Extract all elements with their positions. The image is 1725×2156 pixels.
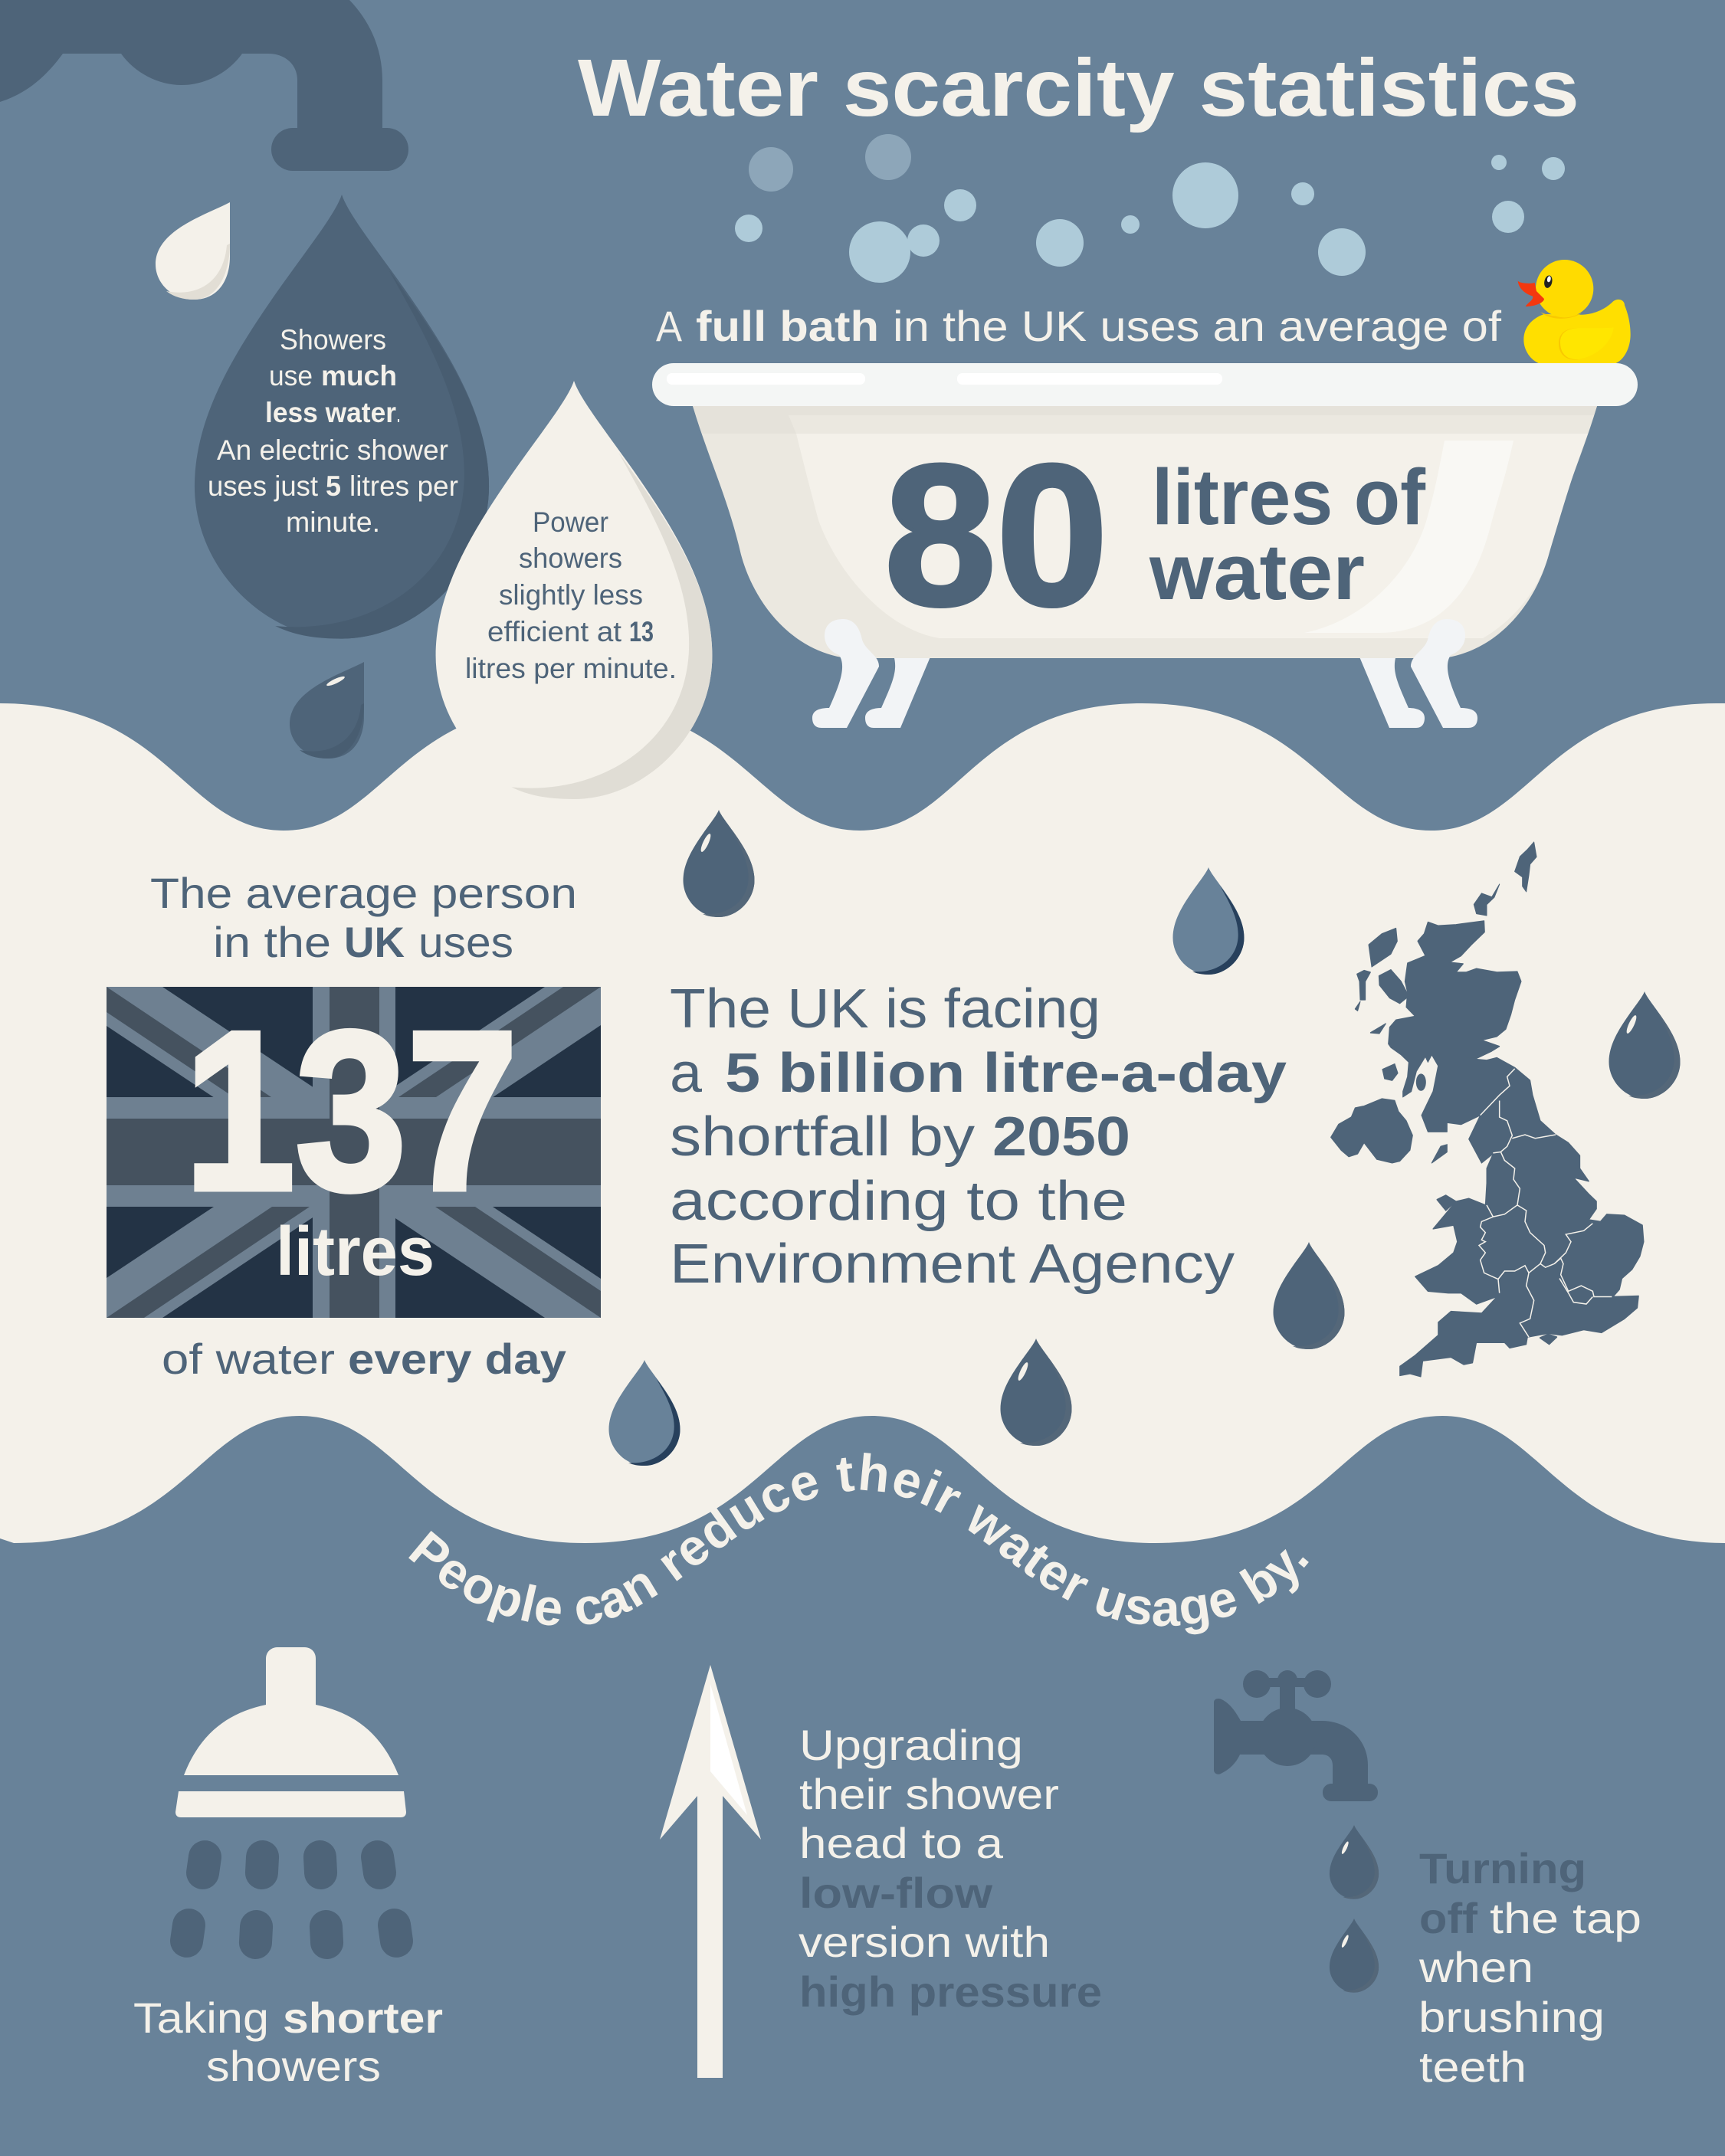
text: UK shortfall statement: 2050 xyxy=(992,1106,1130,1168)
text: UK shortfall statement: shortfall by xyxy=(670,1106,975,1168)
icon: large faucet xyxy=(0,0,408,171)
showers text: . xyxy=(396,397,401,428)
text: upgrading shower head: head to a xyxy=(799,1819,1004,1867)
heading: average person: uses xyxy=(418,918,513,966)
showers text: much xyxy=(321,360,397,392)
text: taking shorter showers xyxy=(133,1994,443,2090)
text: of water every day: of water xyxy=(162,1335,335,1383)
text: turning off the tap: the tap xyxy=(1490,1894,1641,1942)
text: taking shorter showers: showers xyxy=(206,2042,381,2090)
power showers text: litres per minute. xyxy=(465,653,677,684)
icon: shower head xyxy=(168,1647,415,1960)
power showers text xyxy=(465,506,677,684)
text: taking shorter showers: Taking xyxy=(133,1994,269,2042)
80 litres of water: 80 xyxy=(884,423,1108,647)
icon: tap xyxy=(1214,1670,1378,1801)
large dark drop shape xyxy=(195,195,489,639)
text: upgrading shower head xyxy=(799,1721,1102,2016)
callout: showers drop xyxy=(195,195,489,639)
large cream drop shape xyxy=(436,381,712,799)
text: upgrading shower head: their shower xyxy=(799,1770,1059,1818)
showers text: minute. xyxy=(286,506,380,538)
80 litres of water: litres of xyxy=(1152,453,1426,541)
80 litres of water xyxy=(884,423,1426,647)
front tub legs xyxy=(812,619,1477,728)
power showers text: showers xyxy=(519,542,622,574)
137 number: 137 xyxy=(184,984,518,1237)
icon: bathtub xyxy=(652,363,1638,728)
rear tub legs xyxy=(865,655,1425,728)
middle cream wave panel xyxy=(0,703,1725,1543)
icon: tap drop 1 xyxy=(1330,1825,1379,1899)
text: UK shortfall statement: The UK is facing xyxy=(670,978,1100,1040)
text: turning off the tap: teeth xyxy=(1419,2043,1527,2091)
showers text: litres per xyxy=(349,470,458,502)
map: United Kingdom xyxy=(1331,842,1644,1377)
callout: power showers drop xyxy=(436,381,712,799)
power showers text: Power xyxy=(533,506,608,538)
icon: drop F xyxy=(608,1360,680,1466)
showers text: An electric shower xyxy=(217,434,448,466)
icon: drop D xyxy=(1609,991,1680,1099)
showers text: Showers xyxy=(280,324,386,356)
text: of water every day: every day xyxy=(348,1335,566,1383)
full bath heading: A xyxy=(656,302,683,350)
title: Water scarcity statistics xyxy=(578,43,1579,133)
power showers text: 13 xyxy=(629,616,654,647)
text: upgrading shower head: version with xyxy=(799,1918,1050,1966)
text: UK shortfall statement xyxy=(670,978,1287,1295)
text: upgrading shower head: low-flow xyxy=(799,1869,992,1917)
text: turning off the tap: off xyxy=(1419,1894,1477,1942)
heading: average person: UK xyxy=(344,918,405,966)
showers text: use xyxy=(269,360,313,392)
full bath heading: full bath xyxy=(696,302,879,350)
heading: average person: in the xyxy=(213,918,331,966)
80 litres of water: water xyxy=(1149,528,1365,616)
icon: small cream drop xyxy=(156,202,230,300)
heading: average person xyxy=(150,869,577,966)
icon: rubber duck xyxy=(1518,260,1631,364)
arrow: up xyxy=(660,1665,761,2078)
icon: small dark drop xyxy=(290,662,364,759)
text: upgrading shower head: Upgrading xyxy=(799,1721,1023,1769)
showers text xyxy=(208,324,458,538)
text: UK shortfall statement: according to the xyxy=(670,1171,1127,1232)
icon: drop C xyxy=(1001,1338,1071,1446)
text: UK shortfall statement: 5 billion litre-a-day xyxy=(725,1043,1287,1104)
text: taking shorter showers: shorter xyxy=(283,1994,443,2042)
icon: drop E xyxy=(1274,1242,1344,1349)
power showers text: slightly less xyxy=(499,579,643,611)
showers text: uses just xyxy=(208,470,319,502)
text: UK shortfall statement: a xyxy=(670,1043,703,1104)
text: turning off the tap: Turning xyxy=(1419,1844,1586,1892)
power showers text: efficient at xyxy=(487,616,622,647)
litres label: litres xyxy=(276,1214,435,1290)
showers text: less water xyxy=(265,397,396,428)
icon: tap drop 2 xyxy=(1330,1918,1379,1993)
text: turning off the tap: brushing xyxy=(1418,1993,1605,2041)
tub body xyxy=(693,406,1597,658)
showers text: 5 xyxy=(326,470,341,502)
icon: drop A xyxy=(684,810,754,917)
text: of water every day xyxy=(162,1335,566,1383)
full bath heading: in the UK uses an average of xyxy=(893,302,1501,350)
curved heading: People can reduce their water usage by. xyxy=(408,1453,1309,1635)
full bath heading xyxy=(656,302,1501,350)
tub rim xyxy=(652,363,1638,406)
text: turning off the tap xyxy=(1418,1844,1641,2091)
union flag with 137 litres xyxy=(107,984,601,1318)
text: UK shortfall statement: Environment Agency xyxy=(670,1234,1235,1295)
text: upgrading shower head: high pressure xyxy=(799,1968,1102,2016)
icon: drop B xyxy=(1172,867,1245,975)
bubbles xyxy=(735,134,1565,283)
heading: average person: The average person xyxy=(150,869,577,917)
text: turning off the tap: when xyxy=(1418,1943,1533,1991)
